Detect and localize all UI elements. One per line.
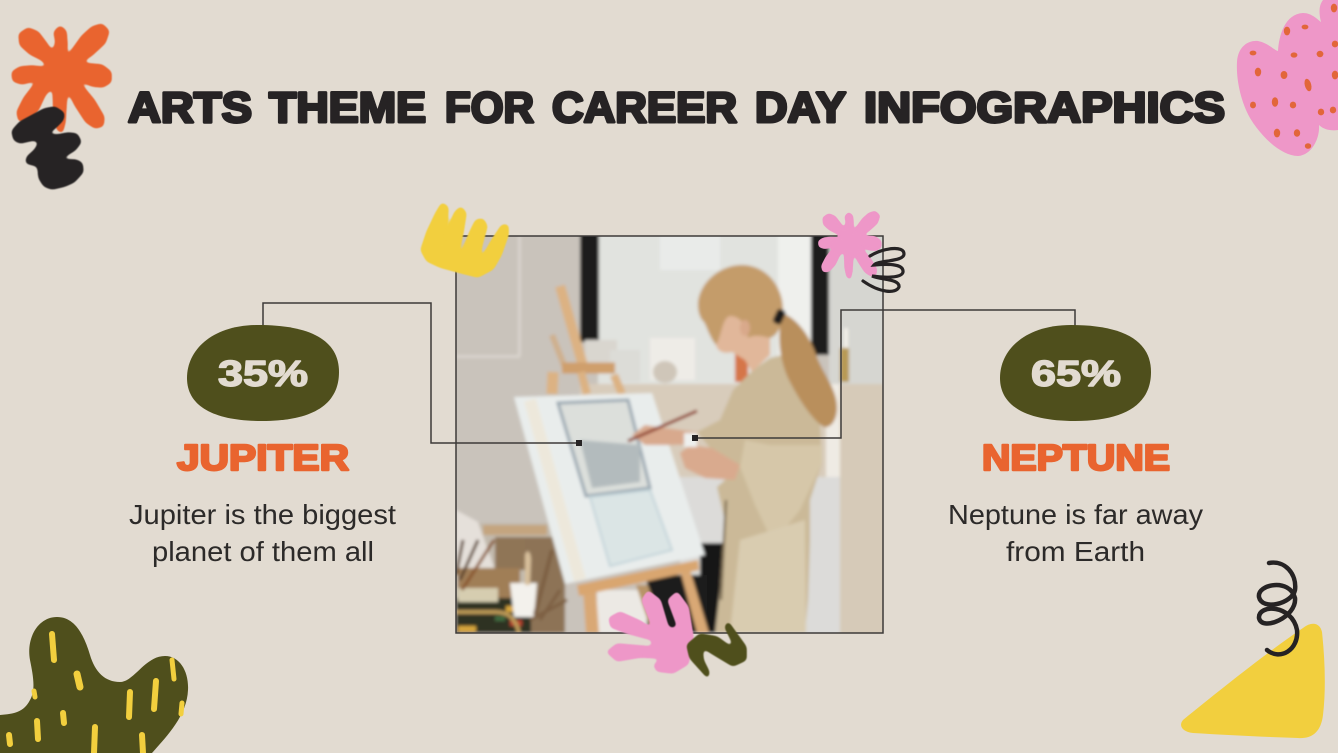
title: CAREER: [552, 84, 737, 132]
title: [128, 84, 1225, 132]
photo: paintbrush: [628, 411, 697, 441]
photo: artist painting on easel: [450, 230, 890, 640]
percentage blob: 35%: 35%: [218, 353, 308, 394]
title: THEME: [269, 84, 426, 132]
connector: photo frame: [456, 236, 883, 633]
text block: Neptune description: Neptune is far away: [948, 499, 1203, 530]
percentage blob: 35%: [187, 325, 339, 421]
text block: Jupiter description: planet of them all: [152, 536, 374, 567]
photo: lower wall and dark opening: [680, 477, 840, 637]
photo: front easel legs and ledge: [583, 590, 599, 633]
photo: woman's hair: [698, 265, 783, 345]
photo: woman's face: [714, 314, 772, 372]
percentage blob: 65%: [1000, 325, 1151, 421]
panel: Neptune: [948, 325, 1203, 567]
title: ARTS: [128, 84, 252, 132]
icon: yellow comb shape: [421, 203, 508, 277]
decoration: yellow triangle: [1181, 624, 1325, 738]
icon: pink hand shape: [607, 591, 693, 673]
text block: Neptune description: from Earth: [1006, 536, 1145, 567]
panel: Jupiter: [129, 325, 396, 567]
title: INFOGRAPHICS: [864, 84, 1225, 132]
photo: back wall: [456, 236, 830, 632]
photo: woman's dress: [697, 355, 822, 633]
title: DAY: [755, 84, 846, 132]
connector: right line to hand: [692, 310, 1075, 441]
photo: glassware: [650, 338, 695, 380]
heading: Neptune: NEPTUNE: [982, 437, 1170, 478]
decoration: black spiral: [1259, 563, 1297, 654]
text block: Neptune description: [948, 499, 1203, 567]
text block: Jupiter description: [129, 499, 396, 567]
decoration: pink dotted blob: [1237, 0, 1338, 156]
icon: black squiggle: [12, 107, 83, 189]
heading: Jupiter: JUPITER: [177, 437, 349, 478]
photo: lower left table: [457, 524, 550, 632]
percentage blob: 65%: 65%: [1031, 353, 1121, 394]
photo: back easel: [552, 286, 622, 394]
photo: ponytail: [779, 313, 837, 427]
icon: olive squiggle: [687, 622, 746, 678]
photo: woman's hands: [632, 425, 698, 445]
icon: orange flower: [12, 24, 111, 133]
icon: pink flower: [819, 211, 881, 279]
photo: canvas: [514, 393, 705, 584]
photo: mantel: [590, 382, 826, 476]
connector: left line to canvas: [263, 303, 582, 446]
decoration: olive blob with yellow dashes: [0, 617, 188, 753]
title: FOR: [445, 84, 534, 132]
text block: Jupiter description: Jupiter is the biggest: [129, 499, 396, 530]
icon: black scribble: [863, 248, 904, 291]
